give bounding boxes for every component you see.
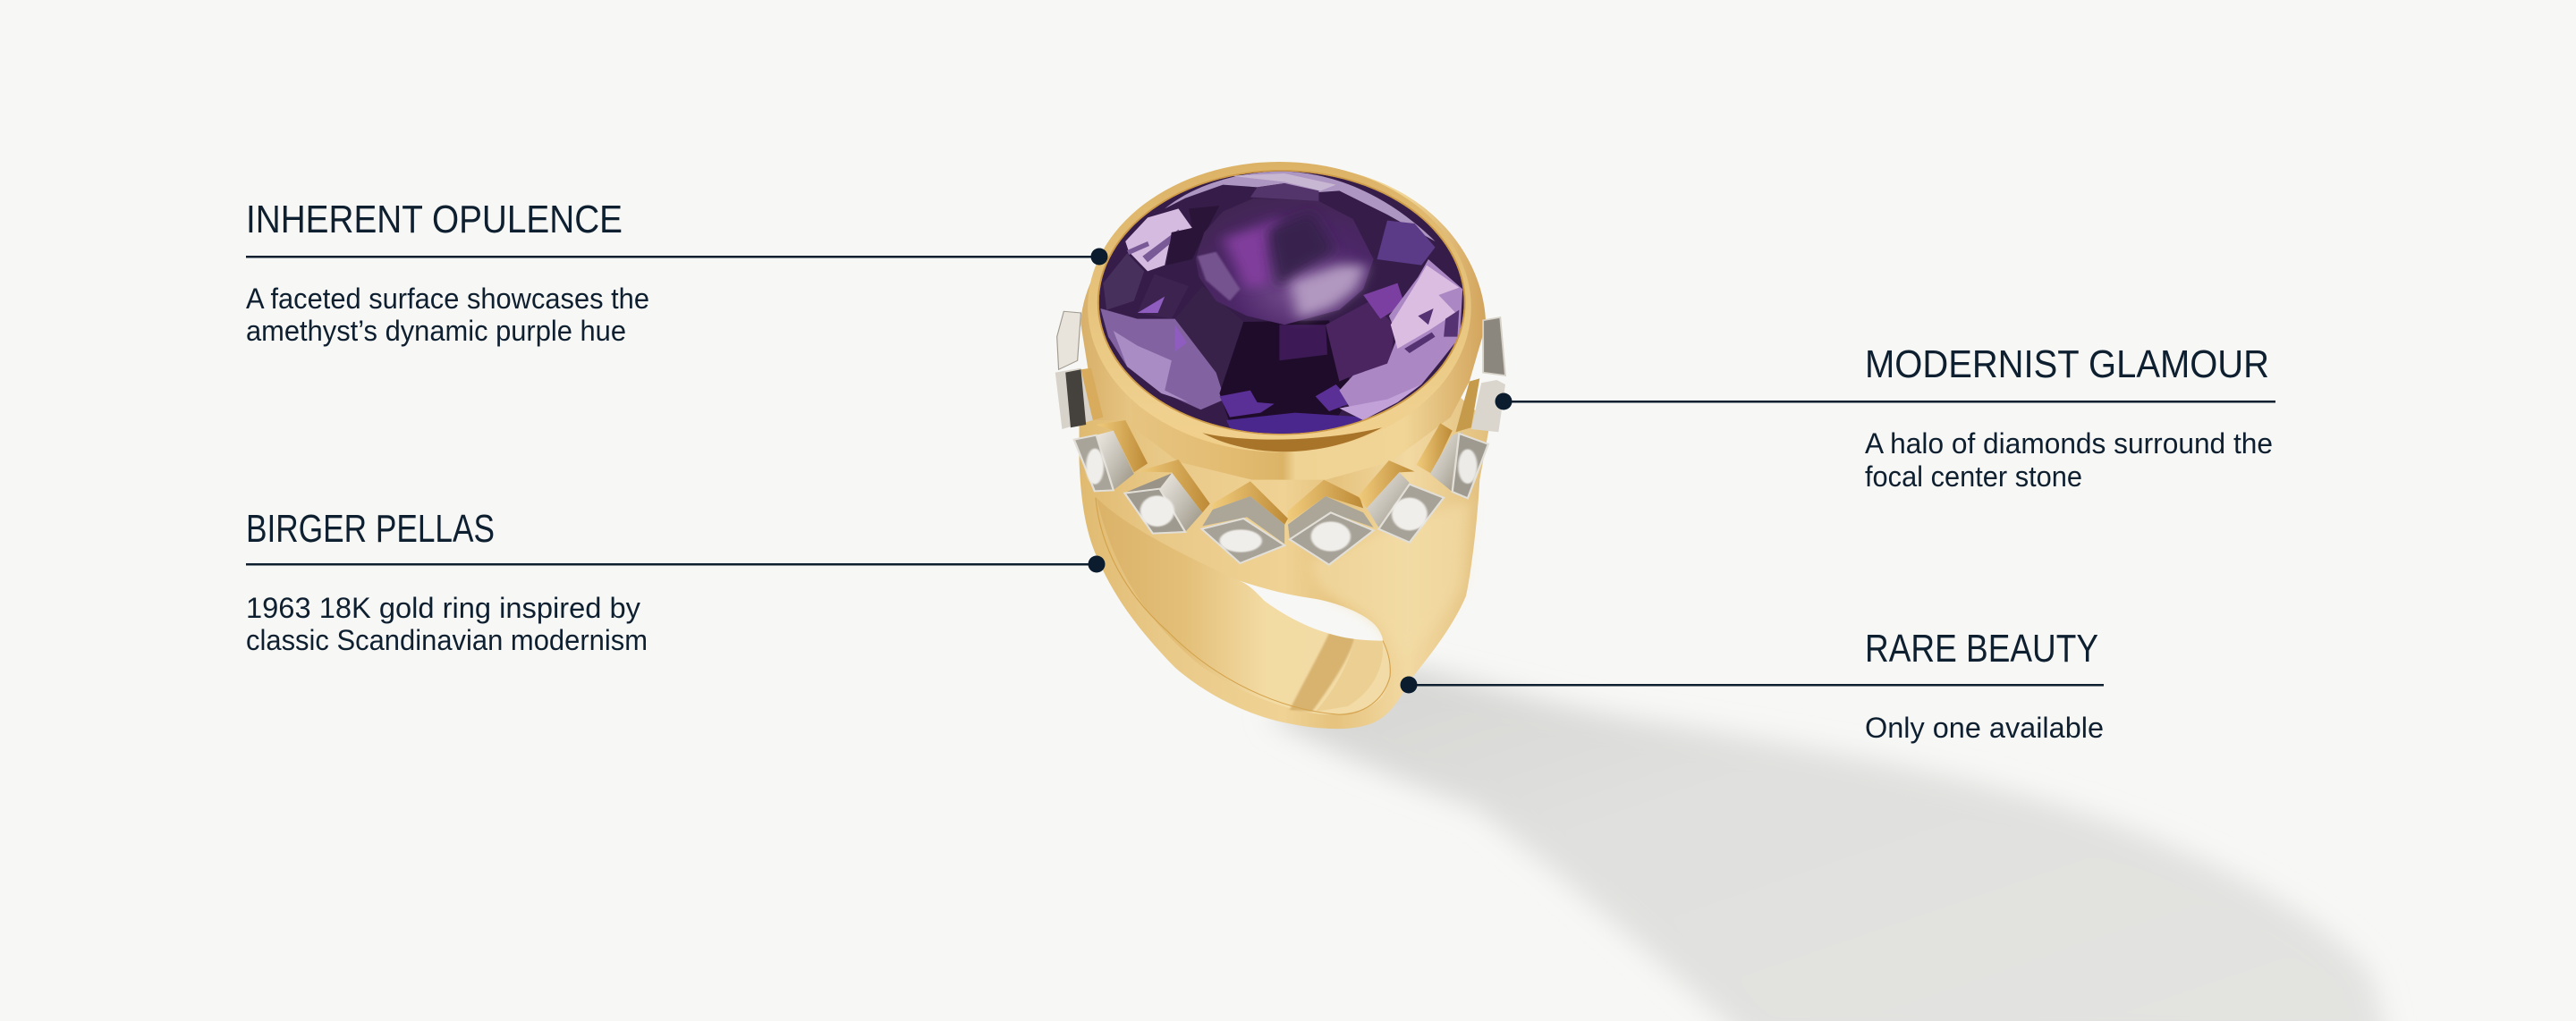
upper left highlight facets bbox=[1125, 208, 1192, 271]
stone base bbox=[1099, 172, 1464, 434]
crown facets bbox=[1165, 172, 1436, 241]
description: A faceted surface showcases the bbox=[246, 283, 649, 315]
dark vertical reflection bbox=[1290, 633, 1355, 712]
description: focal center stone bbox=[1865, 460, 2082, 493]
setting 6 bbox=[1416, 423, 1488, 498]
bottom deep shadow bbox=[1219, 320, 1353, 423]
ring illustration bbox=[1055, 162, 1505, 729]
setting 5 bbox=[1358, 460, 1444, 543]
right bright facets bbox=[1339, 259, 1462, 413]
bezel inner rim bbox=[1097, 170, 1466, 435]
right lower side setting bbox=[1471, 380, 1505, 432]
description: Only one available bbox=[1865, 712, 2104, 744]
right violet bbox=[1363, 283, 1404, 319]
bezel lower bronze reflection bbox=[1202, 427, 1382, 451]
description: classic Scandinavian modernism bbox=[246, 624, 648, 656]
lower left dark band bbox=[1175, 318, 1216, 374]
leader line bbox=[1409, 684, 2104, 687]
description: A halo of diamonds surround the bbox=[1865, 427, 2273, 460]
leader line bbox=[1504, 401, 2275, 402]
bottom right facets bbox=[1339, 384, 1421, 420]
dot bbox=[1088, 556, 1106, 572]
bottom jagged facets bbox=[1219, 384, 1353, 418]
shank outer silhouette bbox=[1080, 393, 1490, 729]
callout: inherent opulence bbox=[246, 198, 1107, 347]
heading: RARE BEAUTY bbox=[1865, 627, 2098, 671]
description: 1963 18K gold ring inspired by bbox=[246, 592, 640, 624]
setting 4 bbox=[1288, 480, 1374, 565]
left lower dark panel bbox=[1065, 369, 1086, 427]
setting 2 bbox=[1124, 460, 1210, 534]
lower left light facets bbox=[1114, 331, 1189, 402]
left gold edge bbox=[1080, 368, 1103, 420]
heading: INHERENT OPULENCE bbox=[246, 198, 623, 241]
finger opening bbox=[1238, 580, 1383, 641]
ring head with stone bbox=[1055, 162, 1505, 480]
ring shank and lower body bbox=[1080, 393, 1490, 729]
left lower side setting bbox=[1055, 368, 1093, 429]
band inner thin rim bbox=[1096, 498, 1390, 714]
bezel collar bbox=[1088, 162, 1471, 452]
lower right facets bbox=[1326, 301, 1394, 382]
front surface highlight bbox=[1312, 501, 1470, 662]
dot bbox=[1401, 676, 1417, 694]
light reflection right of band bbox=[1316, 639, 1383, 712]
leader line bbox=[246, 256, 1099, 257]
diamond settings row bbox=[1074, 420, 1488, 565]
callout: birger pellas bbox=[246, 507, 1106, 656]
upper left dark cuts bbox=[1127, 230, 1182, 262]
gold cup bbox=[1080, 164, 1486, 480]
callout: modernist glamour bbox=[1496, 342, 2275, 493]
table magenta glow bbox=[1223, 217, 1281, 289]
inner band of the shank bbox=[1097, 498, 1390, 714]
dot bbox=[1496, 393, 1512, 409]
upper left dark wedge bbox=[1166, 206, 1219, 266]
setting 3 bbox=[1202, 481, 1288, 563]
upper right facets bbox=[1377, 221, 1436, 266]
left dark facets bbox=[1103, 253, 1144, 310]
bottom star bbox=[1226, 413, 1367, 435]
table facet bbox=[1196, 198, 1374, 325]
right upper side setting bbox=[1483, 317, 1505, 375]
infographic canvas bbox=[246, 162, 2386, 1021]
heading: MODERNIST GLAMOUR bbox=[1865, 342, 2269, 386]
callout: rare beauty bbox=[1401, 627, 2104, 744]
right dark cuts bbox=[1404, 308, 1459, 353]
ring cast shadow bbox=[1267, 664, 2391, 1021]
table dark centre bbox=[1267, 212, 1336, 289]
right gold edge bbox=[1456, 378, 1479, 432]
setting 1 bbox=[1074, 420, 1148, 491]
crown dark facets bbox=[1250, 183, 1318, 201]
left mid facets bbox=[1138, 274, 1189, 319]
left upper side setting bbox=[1057, 311, 1080, 369]
table lower pale glow bbox=[1292, 266, 1367, 319]
amethyst stone bbox=[1099, 172, 1464, 435]
lower left facets bbox=[1100, 308, 1224, 409]
bottom centre violet wedge bbox=[1279, 325, 1327, 360]
leader line bbox=[246, 563, 1097, 565]
heading: BIRGER PELLAS bbox=[246, 507, 495, 551]
crown pale highlight bbox=[1230, 173, 1336, 190]
small violet facets bbox=[1138, 297, 1187, 351]
dot bbox=[1091, 249, 1107, 265]
table left pale facet bbox=[1198, 252, 1240, 301]
description: amethyst’s dynamic purple hue bbox=[246, 315, 626, 347]
right pale patches bbox=[1391, 266, 1459, 349]
